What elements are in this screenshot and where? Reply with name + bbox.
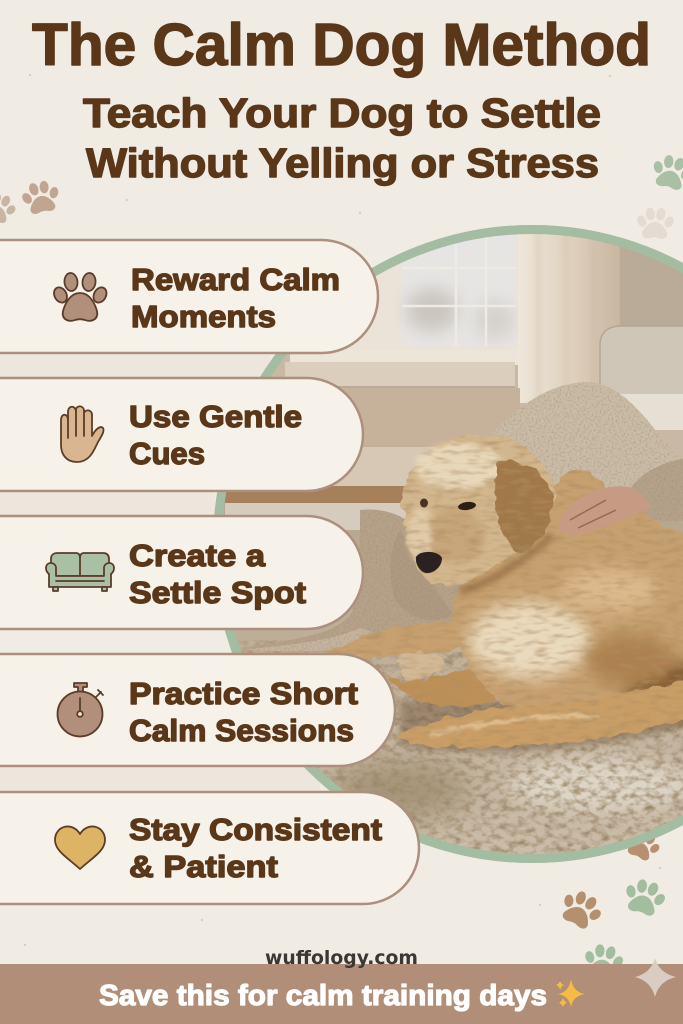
icon: open hand [61,406,104,462]
label: create a settle spot: Create a [129,538,266,573]
icon: yellow sparkles [556,979,585,1007]
window [340,225,520,365]
footer message: Save this for calm training days [99,980,547,1012]
icon: sofa [46,553,114,591]
room wall [271,247,683,486]
knit blanket [240,510,475,652]
panel: stay consistent and patient [0,792,419,904]
subtitle: Teach Your Dog to Settle [83,90,601,136]
icon: stopwatch [58,683,103,736]
label: stay consistent and patient [129,812,382,884]
label: practice short calm sessions: Practice Short [129,676,358,711]
sage ring [218,230,683,858]
dog body [453,470,683,718]
panel: reward calm moments [0,240,378,353]
dog head [402,434,555,585]
subtitle: Without Yelling or Stress [86,140,599,186]
dog legs [320,620,495,707]
icon: paw [51,272,109,321]
shaggy rug [200,503,683,870]
window sill [285,350,518,389]
icon: pale star [635,958,676,997]
label: practice short calm sessions: Calm Sessions [129,713,354,748]
label: use gentle cues [129,399,302,471]
hand petting the dog [558,486,650,535]
subtitle [83,90,601,186]
label: stay consistent and patient: Stay Consistent [129,812,382,847]
label: reward calm moments [131,262,340,334]
label: stay consistent and patient: & Patient [129,849,278,884]
footer band [0,958,683,1024]
shadow under the dog [400,700,683,752]
lower wall and baseboard [200,388,520,503]
label: create a settle spot [129,538,306,610]
label: use gentle cues: Cues [129,436,205,471]
label: reward calm moments: Reward Calm [131,262,340,297]
dog ear [495,460,553,552]
photo: dog resting with owner in a sunlit room [200,220,683,870]
label: create a settle spot: Settle Spot [129,575,306,610]
icon: heart [55,826,105,869]
curtain [518,225,620,403]
label: use gentle cues: Use Gentle [129,399,302,434]
armchair [600,326,683,430]
label: practice short calm sessions [129,676,358,748]
dog nose [416,552,442,573]
shadow under the dog's chin [460,535,552,592]
label: reward calm moments: Moments [131,299,276,334]
panel: create a settle spot [0,516,363,629]
dog tail [397,678,683,748]
dog eyes [420,498,476,511]
panel: practice short calm sessions [0,654,395,766]
website credit: wuffology.com [265,947,418,969]
panel: use gentle cues [0,378,363,491]
owner's draped leg and sweater [493,382,683,525]
title: The Calm Dog Method [32,12,651,78]
